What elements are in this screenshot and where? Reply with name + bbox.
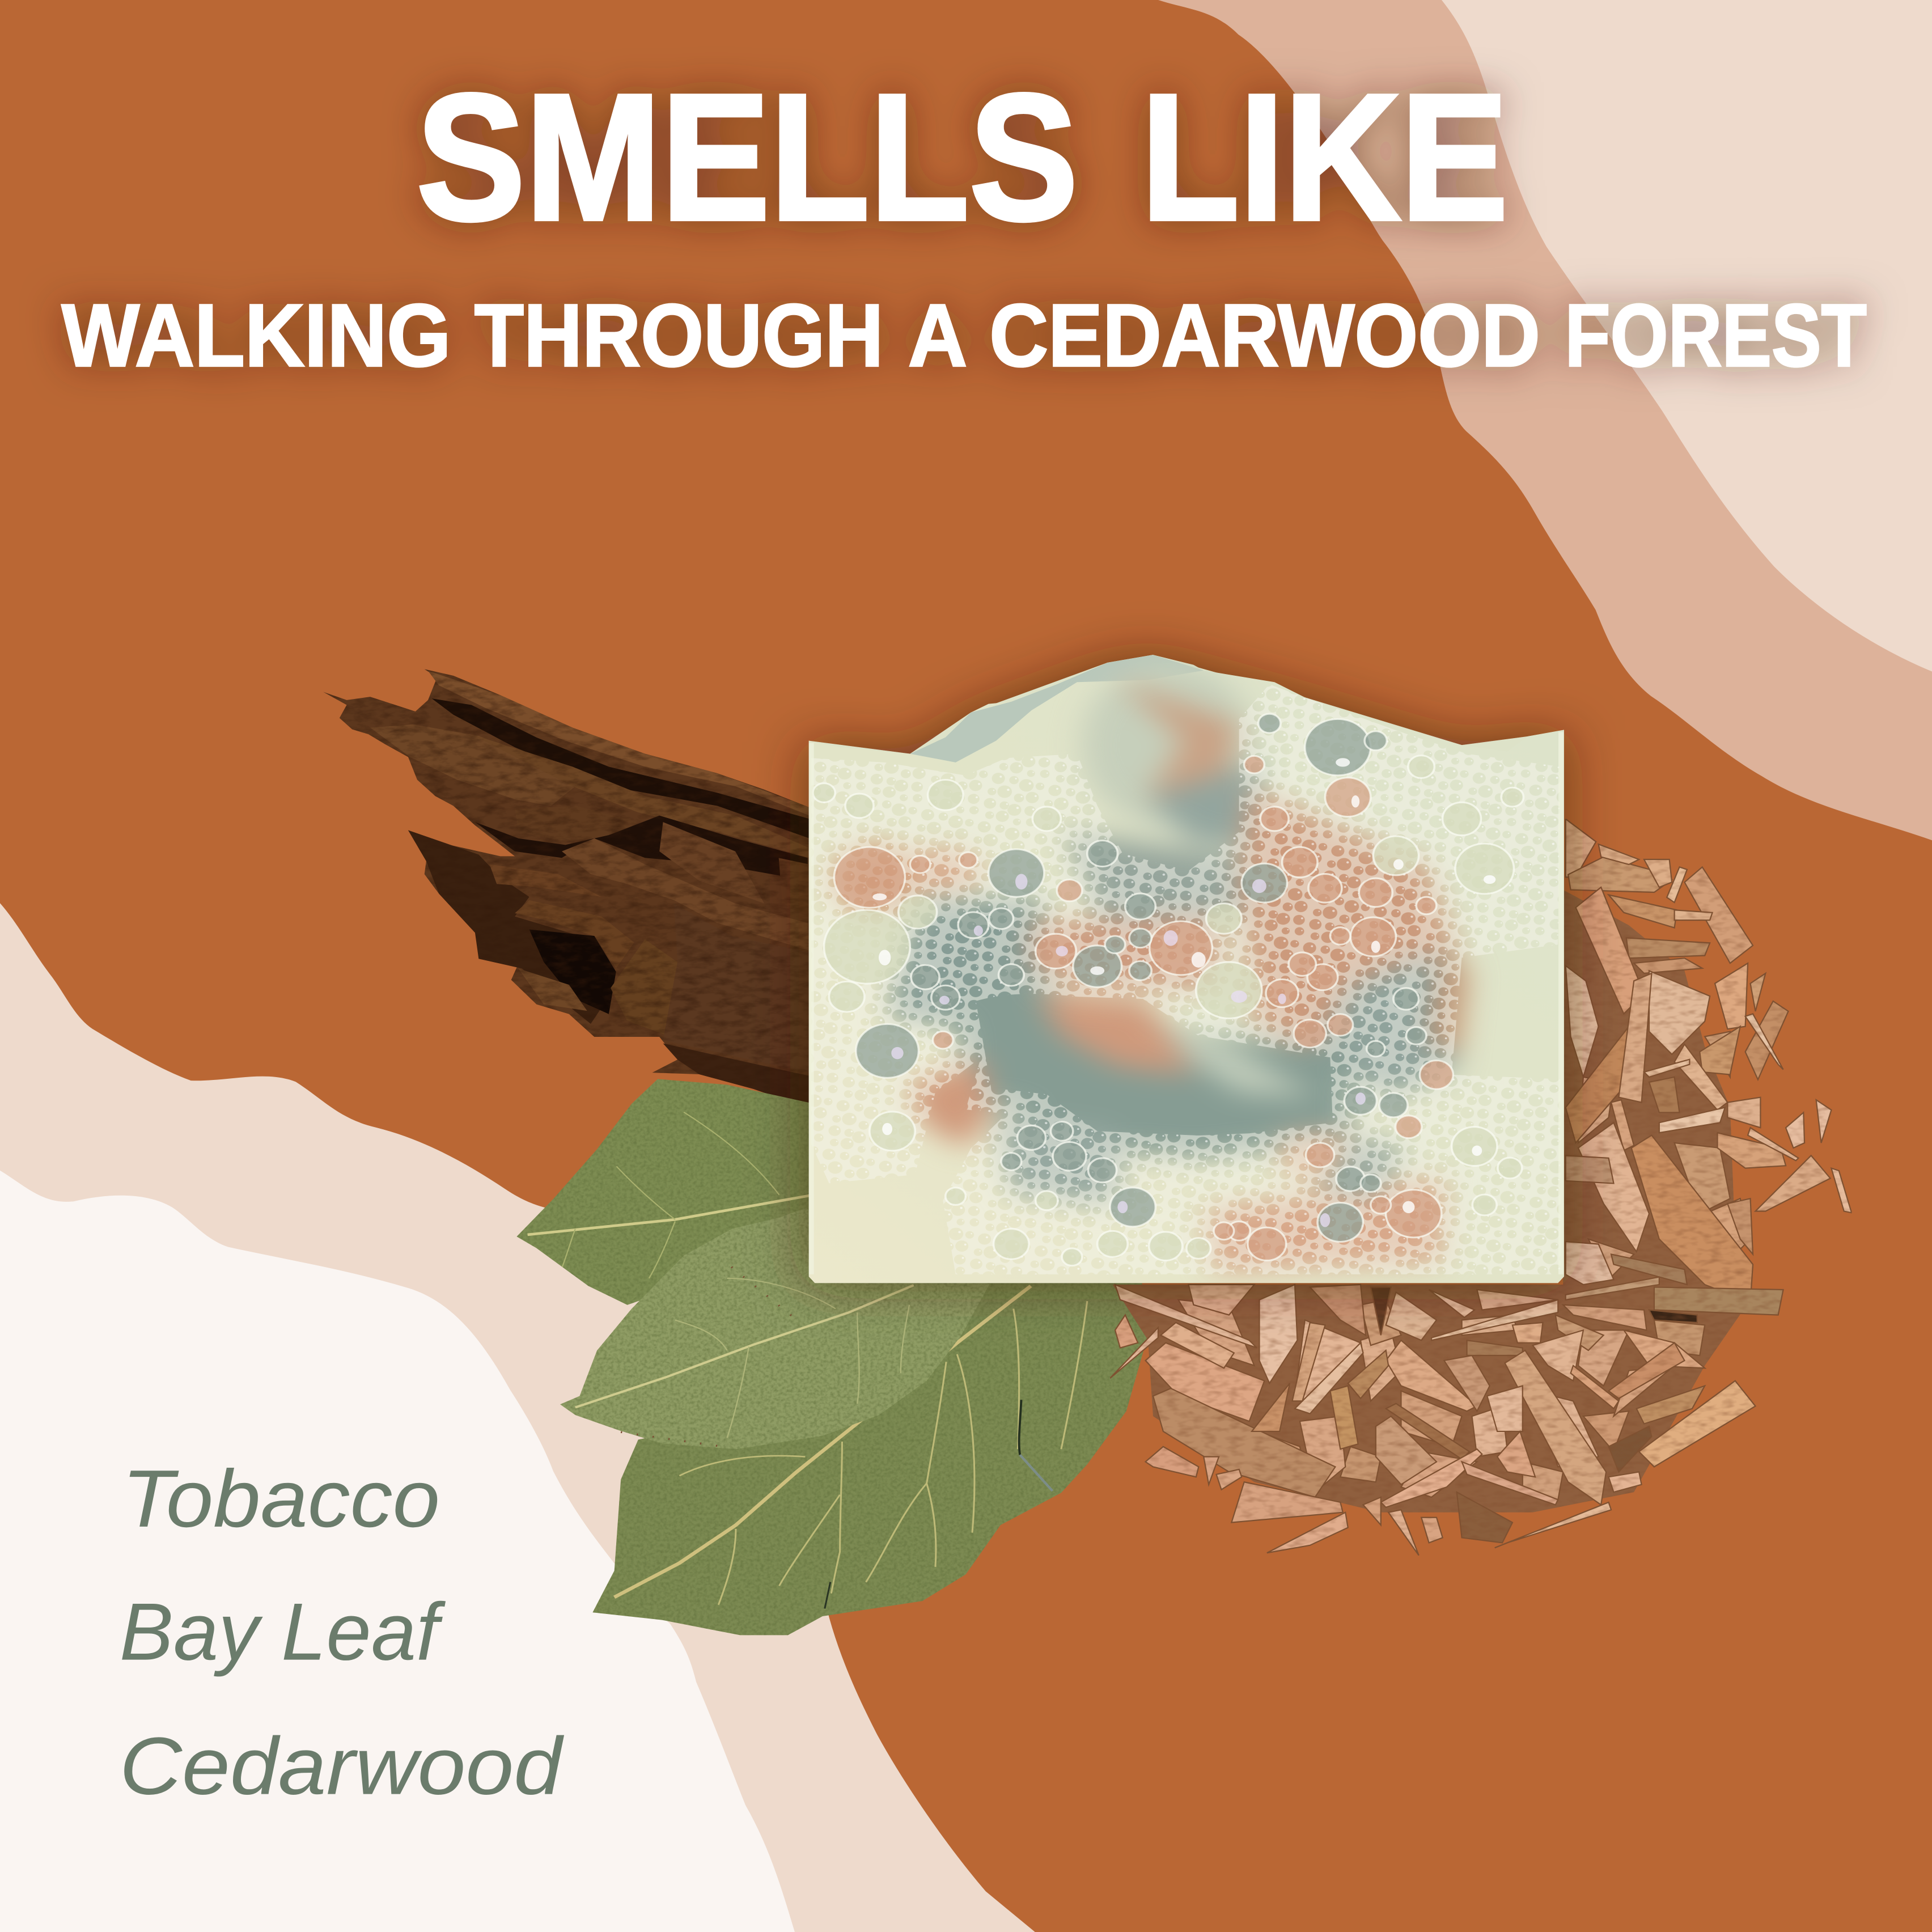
note: tobacco: Tobacco [122,1454,440,1544]
title: smells like: LIKE [1141,57,1508,258]
bubble highlights [872,758,1495,1227]
large bubbles [813,714,1523,1266]
bay leaves [516,1079,1148,1635]
subtitle: FOREST [1565,286,1867,385]
soap bar [794,645,1587,1296]
soap edge highlight [811,732,1561,1274]
subtitle: WALKING [62,286,451,385]
leaf: lower [592,1259,1148,1635]
leaf: upper [516,1079,823,1305]
tobacco leaves [323,669,810,1108]
note: bay leaf: Bay Leaf [120,1587,446,1677]
foam layer [811,684,1561,1274]
top-right tan wave [1158,0,1932,840]
subtitle: THROUGH [474,286,883,385]
leaf: middle [560,1208,990,1449]
note: cedarwood: Cedarwood [120,1721,565,1812]
cedarwood chips [1110,819,1852,1556]
soap base colour [794,645,1587,1296]
soap top ridge [910,655,1204,762]
top-right pale wave [1442,0,1932,672]
bottom-left lightest wave [0,1171,795,1932]
subtitle: A [908,286,967,385]
soap shadow [809,655,1564,1283]
subtitle: CEDARWOOD [989,286,1540,385]
swirl colours [834,663,1467,1270]
subtitle [62,286,1867,385]
pile shadow base [1113,890,1751,1512]
scent notes list [120,1454,565,1812]
title: smells like: SMELLS [417,57,1078,258]
title: smells like [417,57,1508,258]
bottom-left pale wave [0,903,1035,1932]
